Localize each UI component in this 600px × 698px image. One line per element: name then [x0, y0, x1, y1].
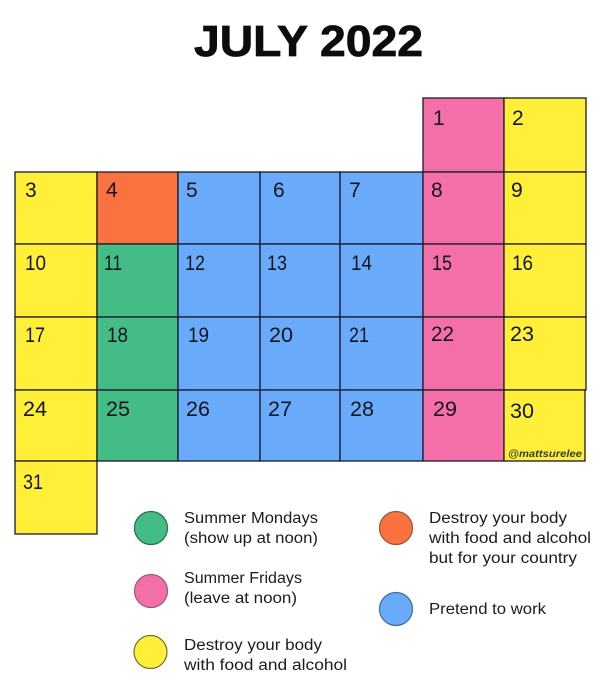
- day 30: yellow with credit: @mattsurelee: [508, 449, 582, 460]
- day 31: yellow: 31: [23, 471, 43, 494]
- day 25: green: 25: [106, 398, 130, 421]
- day 2: yellow: 2: [512, 107, 524, 130]
- day 8: pink: [423, 172, 504, 244]
- day 4: orange: [97, 172, 178, 244]
- day 27: blue: 27: [268, 398, 292, 421]
- day 21: blue: 21: [349, 324, 369, 347]
- day 14: blue: 14: [351, 252, 372, 275]
- calendar grid: [15, 98, 586, 534]
- day 22: pink: [423, 317, 504, 390]
- day 31: yellow: [15, 461, 97, 534]
- legend: destroy your body: Destroy your body: [184, 637, 322, 654]
- day 7: blue: 7: [349, 179, 361, 202]
- legend: pretend to work: [380, 592, 546, 626]
- day 11: green: 11: [104, 252, 122, 275]
- day 11: green: [97, 244, 178, 317]
- legend: summer mondays: (show up at noon): [184, 530, 318, 547]
- day 2: yellow: [504, 98, 586, 172]
- day 13: blue: 13: [267, 252, 287, 275]
- day 26: blue: 26: [186, 398, 210, 421]
- day 30: yellow with credit: [504, 390, 585, 461]
- day 28: blue: 28: [350, 398, 374, 421]
- legend: [134, 510, 591, 674]
- legend: destroy your body for your country: [380, 510, 591, 567]
- day 17: yellow: 17: [25, 324, 45, 347]
- day 15: pink: 15: [432, 252, 452, 275]
- day 12: blue: 12: [185, 252, 205, 275]
- day 25: green: [97, 390, 178, 461]
- day 30: yellow with credit: 30: [510, 400, 534, 423]
- day 28: blue: [340, 390, 423, 461]
- legend: destroy your body for your country: but for your country: [429, 550, 577, 567]
- day 18: green: [97, 317, 178, 390]
- day 19: blue: 19: [188, 324, 209, 347]
- day 14: blue: [340, 244, 423, 317]
- day 18: green: 18: [107, 324, 128, 347]
- legend: summer fridays: [134, 570, 302, 608]
- day 5: blue: 5: [186, 179, 198, 202]
- legend: destroy your body: [134, 636, 347, 674]
- title: JULY 2022: [194, 17, 423, 66]
- day 16: yellow: 16: [512, 252, 533, 275]
- day 20: blue: 20: [269, 324, 293, 347]
- day 24: yellow: [15, 390, 97, 461]
- day 23: yellow: 23: [510, 323, 534, 346]
- day 29: pink: 29: [433, 398, 457, 421]
- day 29: pink: [423, 390, 504, 461]
- day 10: yellow: 10: [25, 252, 46, 275]
- day 6: blue: 6: [273, 179, 285, 202]
- day 1: Summer Friday: 1: [433, 107, 445, 130]
- day 24: yellow: 24: [23, 398, 47, 421]
- day 12: blue: [178, 244, 260, 317]
- day 7: blue: [340, 172, 423, 244]
- day 9: yellow: 9: [511, 179, 523, 202]
- day 21: blue: [340, 317, 423, 390]
- day 3: yellow: 3: [25, 179, 37, 202]
- legend: destroy your body: with food and alcohol: [183, 657, 347, 674]
- legend: summer fridays: (leave at noon): [184, 590, 297, 607]
- day 16: yellow: [504, 244, 586, 317]
- day 6: blue: [260, 172, 340, 244]
- day 9: yellow: [504, 172, 586, 244]
- day 13: blue: [260, 244, 340, 317]
- day 8: pink: 8: [431, 179, 443, 202]
- day 19: blue: [178, 317, 260, 390]
- day 22: pink: 22: [431, 323, 454, 346]
- day 3: yellow: [15, 172, 97, 244]
- day 23: yellow: [504, 317, 586, 390]
- legend: summer mondays: [134, 510, 318, 547]
- legend: summer mondays: Summer Mondays: [184, 510, 318, 527]
- day 27: blue: [260, 390, 340, 461]
- day 15: pink: [423, 244, 504, 317]
- day 17: yellow: [15, 317, 97, 390]
- legend: destroy your body for your country: Destroy your body: [429, 510, 567, 527]
- legend: destroy your body for your country: with food and alcohol: [428, 530, 591, 547]
- day 1: Summer Friday: [423, 98, 504, 172]
- day 10: yellow: [15, 244, 97, 317]
- day 4: orange: 4: [106, 179, 118, 202]
- legend: pretend to work: Pretend to work: [429, 601, 546, 618]
- legend: summer fridays: Summer Fridays: [184, 570, 302, 587]
- day 26: blue: [178, 390, 260, 461]
- day 20: blue: [260, 317, 340, 390]
- day 5: blue: [178, 172, 260, 244]
